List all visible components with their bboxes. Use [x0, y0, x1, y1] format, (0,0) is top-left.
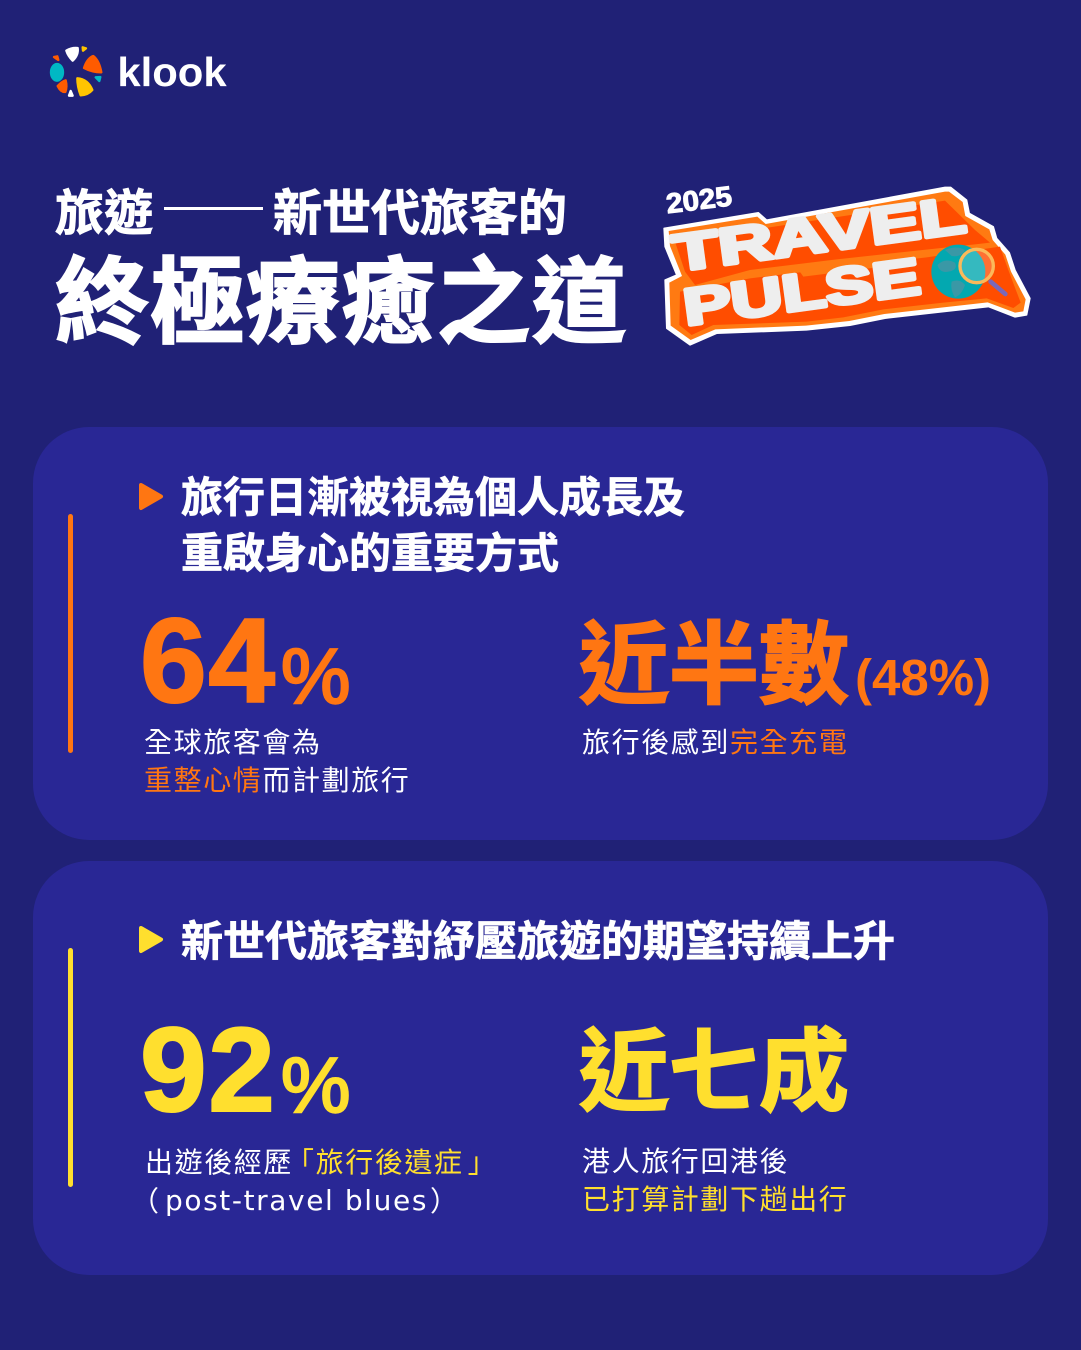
- heading: panel 2: 新世代旅客對紓壓旅遊的期望持續上升: [181, 918, 895, 965]
- badge outline: [664, 187, 1030, 345]
- title line 1: 旅遊: [55, 187, 153, 241]
- icon: yellow triangle: [139, 926, 164, 954]
- accent bar orange: [68, 514, 73, 753]
- stat: percent sign: %: [281, 1041, 350, 1129]
- stat: 48%: (48%): [855, 649, 991, 706]
- caption: 64%: 重整心情而計劃旅行: [144, 765, 410, 796]
- stat: 64%: 64: [140, 594, 276, 728]
- caption: 92% line 2: （: [131, 1186, 159, 1217]
- panel: post-travel: [33, 861, 1048, 1275]
- stat: 92%: 92: [140, 1003, 276, 1137]
- badge: 2025 Travel Pulse: [663, 180, 1031, 346]
- title dash: [164, 207, 263, 210]
- badge shadow: PULSE: [679, 247, 1021, 335]
- caption: nearly half: 旅行後感到完全充電: [582, 727, 848, 758]
- caption: 64%: 全球旅客會為: [144, 726, 322, 758]
- logo: klook: klook: [117, 49, 227, 95]
- caption: 92% line 2: ）: [430, 1186, 458, 1217]
- logo: klook: [50, 46, 227, 97]
- caption: nearly 70%: [582, 1146, 848, 1215]
- badge gap highlight: [797, 255, 890, 277]
- accent bar yellow: [68, 948, 73, 1187]
- icon: orange triangle: [139, 483, 164, 510]
- stat: nearly half: 近半數: [579, 616, 849, 716]
- icon: globe with magnifier: [931, 245, 1005, 299]
- caption: 92% line 1: 出遊後經歷「旅行後遺症」: [145, 1147, 497, 1178]
- badge word TRAVEL: TRAVEL: [669, 185, 969, 282]
- caption: nearly 70%: 已打算計劃下趟出行: [582, 1184, 848, 1215]
- heading: panel 1: 旅行日漸被視為個人成長及: [181, 474, 685, 521]
- caption: 92% line 2: post-travel blues: [165, 1184, 428, 1217]
- heading: panel 1: 重啟身心的重要方式: [181, 530, 559, 577]
- badge word PULSE: PULSE: [680, 247, 924, 336]
- heading: panel 1: [181, 474, 685, 577]
- stat: nearly 70%: 近七成: [579, 1023, 849, 1123]
- badge year 2025: 2025: [664, 180, 734, 219]
- panel: personal growth: [33, 427, 1048, 840]
- caption: nearly 70%: 港人旅行回港後: [582, 1146, 789, 1176]
- caption: 64%: [144, 726, 410, 796]
- badge orange: [669, 192, 1026, 340]
- title line 2: 終極療癒之道: [55, 250, 627, 355]
- title line 1 continued: 新世代旅客的: [273, 187, 567, 241]
- stat: percent sign: %: [281, 632, 350, 720]
- badge shadow: TRAVEL: [675, 201, 990, 285]
